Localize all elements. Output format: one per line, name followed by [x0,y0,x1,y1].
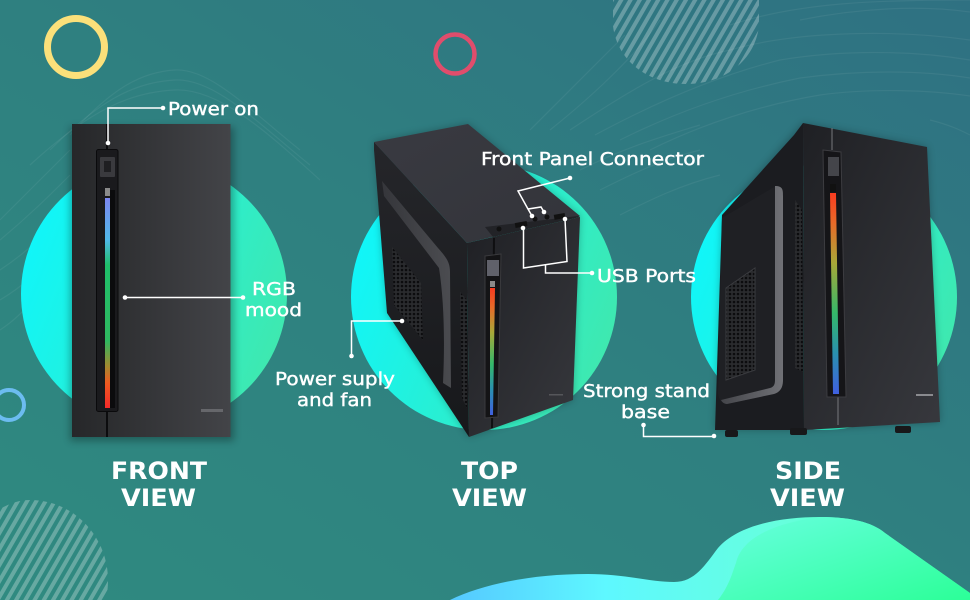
PC case: top view [374,124,580,437]
front panel [803,123,940,430]
callout: front panel connector: Front Panel Connector [481,149,705,170]
callout: power supply and fan [275,319,404,411]
decorative ring: red [436,34,474,74]
callout: front panel connector [481,149,705,218]
heading: front view [111,457,208,512]
callout: power supply and fan: and fan [297,390,372,411]
PC case: side view [715,123,940,437]
RGB light bar [490,288,495,415]
glow circle: side [691,164,957,430]
decorative ring: blue [0,390,24,420]
bottom wave blob [450,517,970,600]
feet [725,430,738,437]
callout: power supply and fan: Power suply [275,369,395,390]
heading: side view: VIEW [770,484,845,512]
hatched circle: bottom left [0,500,108,600]
glow circle: top [351,164,617,430]
front panel [467,217,580,437]
callout: strong stand base: base [621,402,670,423]
heading: front view: FRONT [111,457,208,485]
heading: top view: VIEW [452,484,527,512]
callout: USB ports [521,217,696,287]
RGB light bar [830,193,839,394]
left side panel [374,142,469,437]
callout: RGB mood [123,279,302,321]
PC case: front view [70,124,234,441]
callout: RGB mood: mood [245,300,302,321]
heading: front view: VIEW [121,484,196,512]
callout: RGB mood: RGB [252,279,296,300]
side panel [715,123,804,430]
callout: strong stand base [583,381,716,438]
heading: side view [770,457,845,512]
RGB light bar [105,198,110,408]
callout: strong stand base: Strong stand [583,381,710,402]
top panel [374,124,580,243]
background wave lines [0,0,970,330]
heading: side view: SIDE [775,457,841,485]
hatched circle: top right [613,0,759,84]
callout: power on [106,99,259,145]
heading: top view: TOP [461,457,518,485]
glow circle: front [21,161,287,427]
decorative ring: yellow [48,18,104,76]
heading: top view [452,457,527,512]
callout: USB ports: USB Ports [597,266,696,287]
callout: power on: Power on [168,99,259,120]
